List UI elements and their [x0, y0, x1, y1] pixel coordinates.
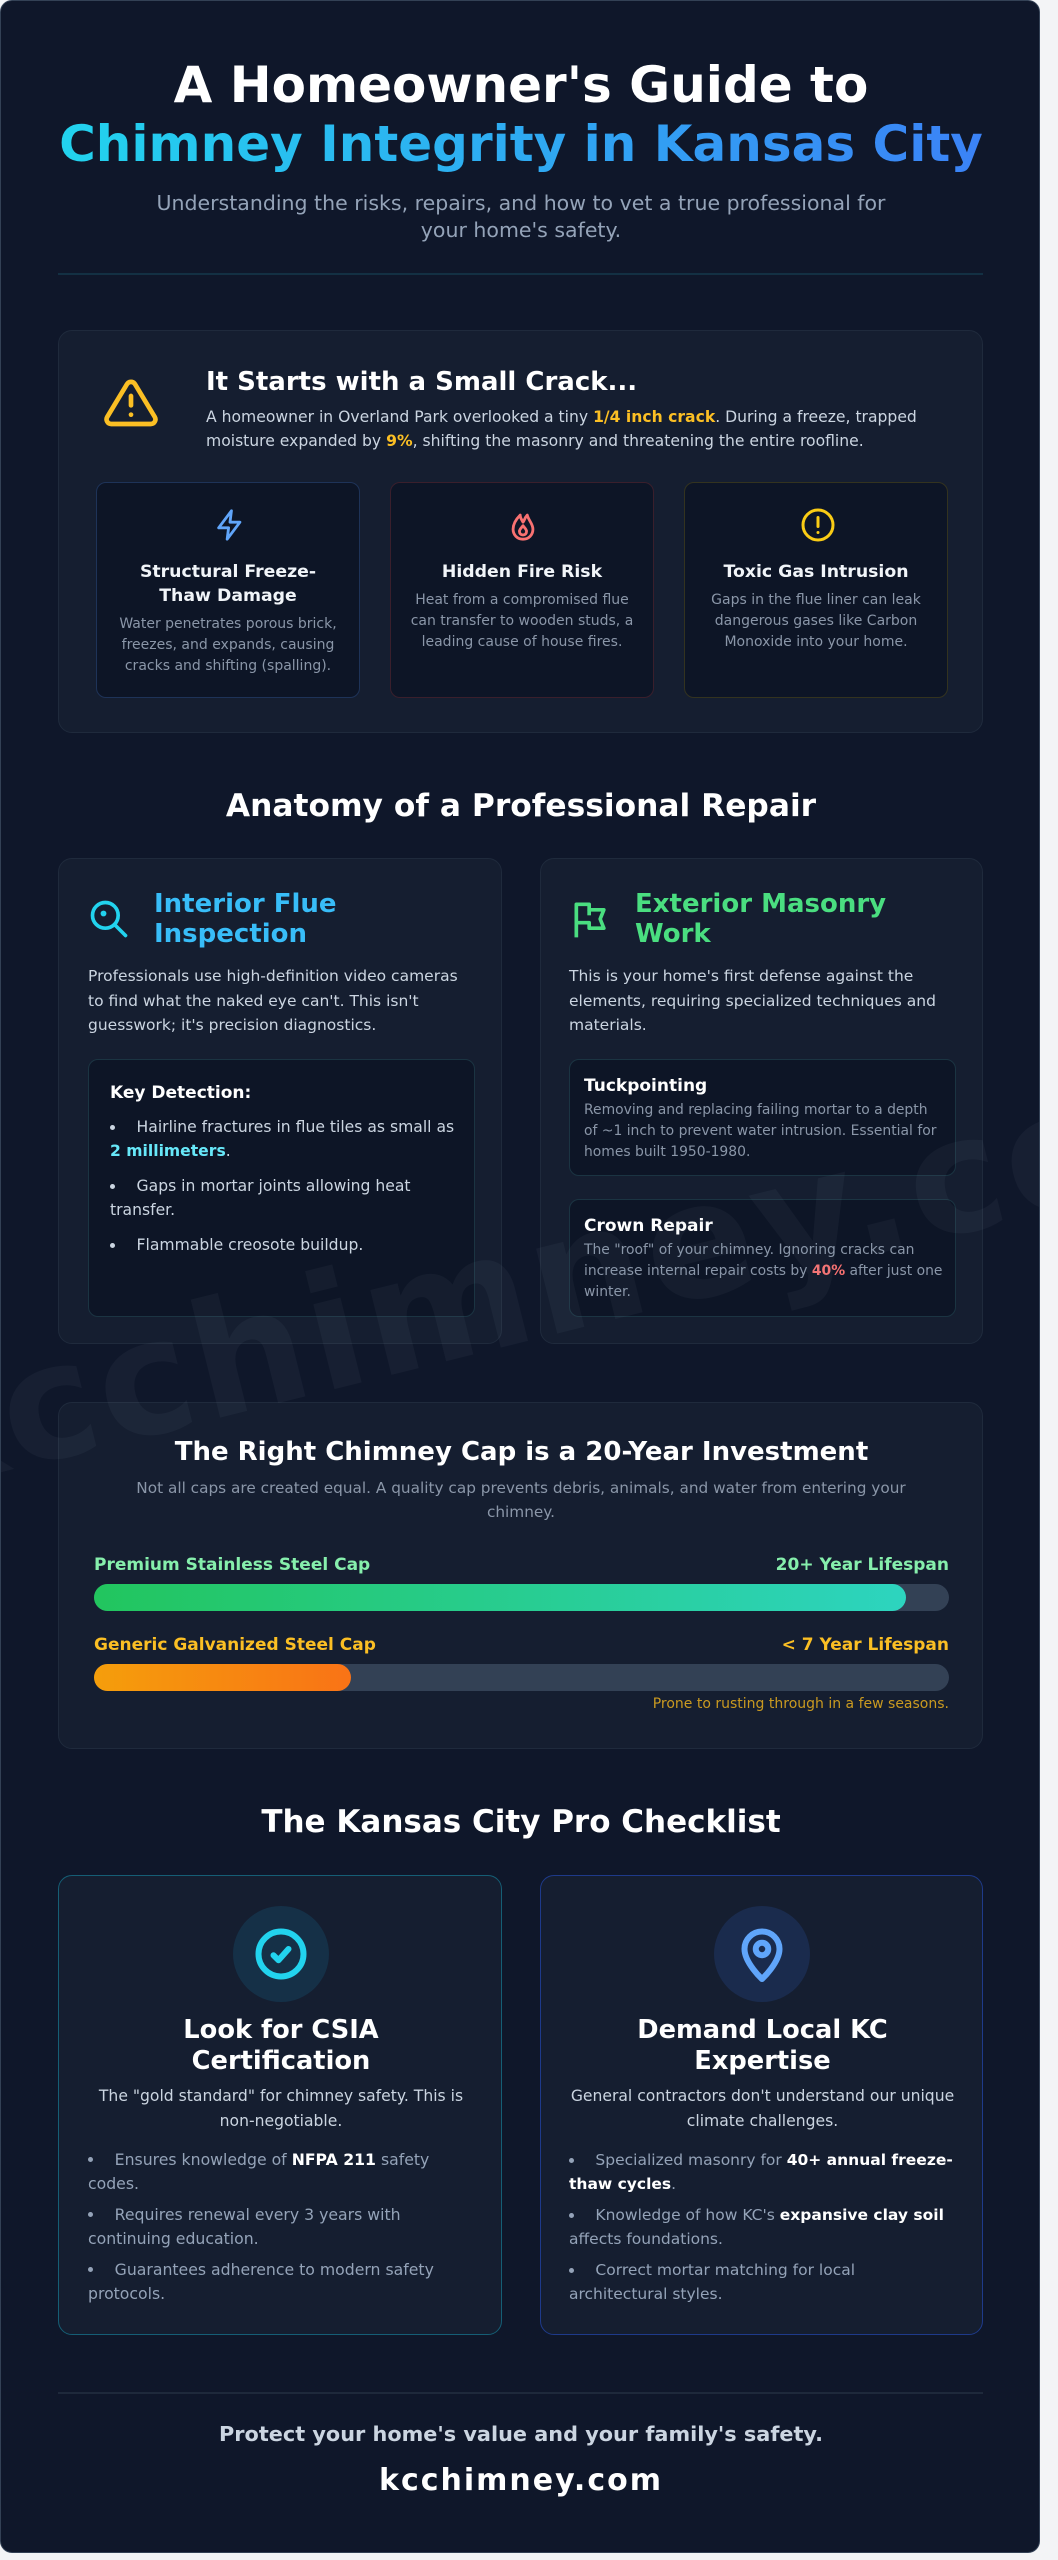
bar chart: premium: Premium Stainless Steel Cap: [94, 1555, 370, 1575]
card: freeze-thaw: Thaw Damage: [159, 586, 297, 606]
footer tagline: Protect your home's value and your family's safety.: [219, 2422, 823, 2446]
text: This is your home's first defense against the elements, requiring specialized techniques and materials.: [569, 967, 936, 1034]
heading: Exterior Masonry: [635, 889, 886, 919]
title: Demand Local KC: [637, 2015, 888, 2045]
key detection box: Gaps in mortar joints allowing heat transfer.: [110, 1177, 411, 1219]
bar chart: generic: Generic Galvanized Steel Cap: [94, 1635, 376, 1655]
icon: warning: [104, 380, 158, 426]
panel: interior flue: [58, 858, 502, 1344]
card: freeze-thaw: Water penetrates porous brick, freezes, and expands, causing cracks and shifting (spalling).: [119, 616, 337, 674]
key detection box: Hairline fractures in flue tiles as small as 2 millimeters.: [110, 1118, 454, 1160]
card: freeze-thaw: Structural Freeze-: [140, 562, 316, 582]
card: toxic gas: Gaps in the flue liner can leak dangerous gases like Carbon Monoxide into your home.: [711, 592, 921, 650]
title: [183, 2015, 379, 2076]
description: General contractors don't understand our unique climate challenges.: [571, 2087, 954, 2130]
title: Certification: [192, 2046, 370, 2076]
key detection box: Key Detection:: [110, 1083, 251, 1103]
bullets: Knowledge of how KC's expansive clay soil affects foundations.: [569, 2206, 944, 2248]
box: crown repair: The "roof" of your chimney. Ignoring cracks can increase internal repair costs by 40% after just one winter.: [584, 1242, 942, 1300]
heading: [635, 889, 886, 949]
subtitle: Understanding the risks, repairs, and how to vet a true professional for your home's safety.: [156, 191, 885, 242]
card: fire risk: Heat from a compromised flue can transfer to wooden studs, a leading cause of house fires.: [411, 592, 633, 650]
story text: A homeowner in Overland Park overlooked a tiny 1/4 inch crack. During a freeze, trapped moisture expanded by 9%, shifting the masonry and threatening the entire roofline.: [206, 408, 917, 450]
title: [637, 2015, 888, 2076]
box: tuckpointing: Removing and replacing failing mortar to a depth of ~1 inch to prevent water intrusion. Essential for homes built 1950-1980.: [584, 1102, 936, 1160]
bullets: Guarantees adherence to modern safety protocols.: [88, 2260, 434, 2303]
bullets: [569, 2151, 953, 2303]
footer url: kcchimney.com: [379, 2463, 663, 2498]
card: fire risk: Hidden Fire Risk: [442, 562, 602, 582]
description: The "gold standard" for chimney safety. This is non-negotiable.: [99, 2087, 463, 2130]
heading: Work: [635, 919, 711, 949]
subtitle: Not all caps are created equal. A quality cap prevents debris, animals, and water from entering your chimney.: [136, 1479, 906, 1521]
box: crown repair: Crown Repair: [584, 1216, 713, 1236]
bar chart: generic: Prone to rusting through in a few seasons.: [653, 1696, 949, 1712]
icon: alert circle: [802, 508, 834, 542]
bullets: Specialized masonry for 40+ annual freeze-thaw cycles.: [569, 2151, 953, 2193]
heading: anatomy: Anatomy of a Professional Repair: [226, 788, 816, 824]
panel: small crack: [58, 330, 983, 733]
heading: [154, 889, 337, 949]
card: toxic gas: Toxic Gas Intrusion: [723, 562, 909, 582]
bullets: Requires renewal every 3 years with continuing education.: [88, 2205, 401, 2248]
bar chart: premium: [94, 1555, 949, 1611]
bar chart: premium: 20+ Year Lifespan: [776, 1555, 949, 1575]
heading: Inspection: [154, 919, 307, 949]
heading: It Starts with a Small Crack...: [206, 367, 637, 397]
bullets: Ensures knowledge of NFPA 211 safety codes.: [88, 2150, 429, 2193]
box: crown repair: [569, 1199, 956, 1317]
card: fire risk: [390, 482, 654, 698]
card: local expertise: [540, 1875, 983, 2335]
box: tuckpointing: [569, 1059, 956, 1176]
card: toxic gas: [684, 482, 948, 698]
heading: Interior Flue: [154, 889, 337, 919]
bar chart: generic: [94, 1635, 949, 1712]
title: Chimney Integrity in Kansas City: [59, 115, 983, 173]
card: freeze-thaw: [96, 482, 360, 698]
title: A Homeowner's Guide to: [174, 56, 868, 114]
card: CSIA: [58, 1875, 502, 2335]
title: Look for CSIA: [183, 2015, 379, 2045]
bullets: Correct mortar matching for local architectural styles.: [569, 2261, 855, 2303]
box: tuckpointing: Tuckpointing: [584, 1076, 707, 1096]
icon: flag: [574, 902, 606, 938]
icon: map pin: [714, 1906, 810, 2002]
icon: bolt: [217, 509, 242, 541]
bullets: [88, 2150, 434, 2303]
title: Expertise: [694, 2046, 831, 2076]
text: Professionals use high-definition video cameras to find what the naked eye can't. This isn't guesswork; it's precision diagnostics.: [88, 967, 458, 1034]
heading: checklist: The Kansas City Pro Checklist: [261, 1804, 781, 1840]
heading: The Right Chimney Cap is a 20-Year Investment: [175, 1437, 868, 1467]
key detection box: [88, 1059, 475, 1317]
bar chart: generic: < 7 Year Lifespan: [782, 1635, 949, 1655]
title: [59, 56, 983, 173]
icon: check badge: [233, 1906, 329, 2002]
icon: flame: [512, 514, 534, 541]
panel: chimney cap: [58, 1402, 983, 1749]
icon: search: [90, 900, 128, 938]
key detection box: Flammable creosote buildup.: [137, 1236, 363, 1254]
panel: exterior masonry: [540, 858, 983, 1344]
